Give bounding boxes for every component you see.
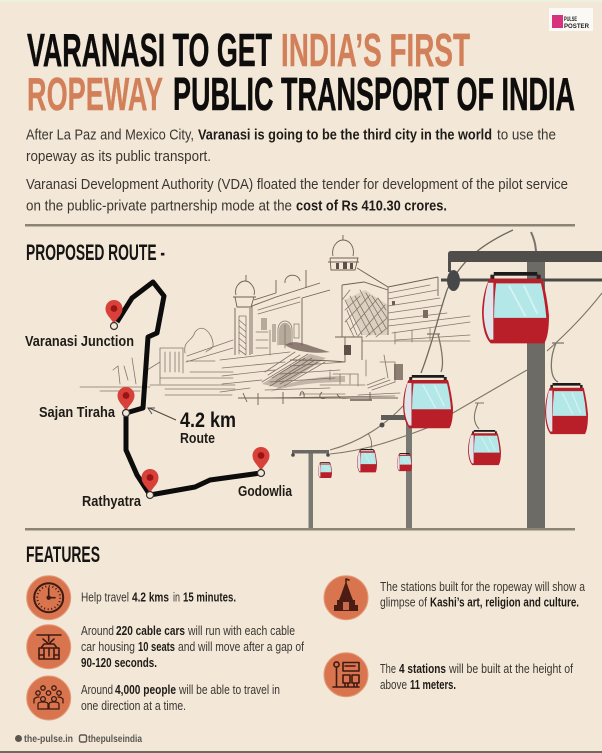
route line bbox=[117, 282, 261, 495]
gondola: near centre bbox=[403, 334, 453, 428]
main palace bbox=[252, 270, 330, 354]
label: Godowlia: Godowlia bbox=[238, 484, 293, 500]
intro paragraph 2: cost of Rs 410.30 crores. bbox=[296, 198, 447, 214]
label: Sajan Tiraha: Sajan Tiraha bbox=[39, 405, 116, 421]
feature text: cable cars: and will move after a gap of bbox=[178, 639, 304, 654]
icon: cable car bbox=[27, 625, 71, 669]
feature text: cable cars: Around bbox=[81, 623, 114, 638]
callout: 4.2 km route: 4.2 km bbox=[180, 409, 236, 432]
feature text: art and culture bbox=[380, 579, 586, 610]
feature text: cable cars: 90-120 seconds. bbox=[81, 655, 157, 670]
logo: Pulse Poster: POSTER bbox=[564, 24, 590, 30]
feature text: travel time: in bbox=[173, 590, 180, 605]
intro paragraph 1: After La Paz and Mexico City, bbox=[26, 126, 194, 144]
feature text: cable cars: car housing bbox=[81, 639, 135, 654]
heading: features: FEATURES bbox=[26, 542, 100, 567]
feature text: station height: will be built at the height of bbox=[448, 661, 573, 676]
gondola: distant bbox=[357, 433, 377, 472]
feature text: station height: The bbox=[380, 661, 396, 676]
label: Rathyatra: Rathyatra bbox=[82, 494, 142, 510]
left tower bbox=[233, 275, 256, 355]
footer: website and social handle: thepulseindia bbox=[88, 733, 142, 745]
feature text: cable cars: 220 cable cars bbox=[116, 623, 185, 638]
big tower with top beam bbox=[441, 251, 602, 529]
footer: website and social handle: the-pulse.in bbox=[24, 733, 73, 745]
feature text: people capacity bbox=[81, 682, 280, 713]
feature text: cable cars bbox=[81, 623, 304, 670]
cables bbox=[330, 230, 602, 454]
feature text: art and culture: glimpse of bbox=[380, 595, 427, 610]
callout: 4.2 km route bbox=[180, 409, 236, 447]
feature text: station height: 11 meters. bbox=[410, 677, 456, 692]
intro paragraph 1: Varanasi is going to be the third city in the world bbox=[198, 126, 492, 144]
feature text: travel time bbox=[81, 590, 236, 605]
feature text: people capacity: one direction at a time. bbox=[81, 698, 186, 713]
pin: Varanasi Junction bbox=[106, 300, 122, 330]
pin: Godowlia bbox=[252, 447, 270, 476]
intro paragraph 1 bbox=[26, 126, 556, 165]
gondola: right behind tower bbox=[545, 343, 588, 434]
pin: Sajan Tiraha bbox=[118, 387, 134, 416]
icon: station bbox=[324, 653, 368, 697]
gondola: farthest bbox=[318, 462, 332, 478]
intro paragraph 1: ropeway as its public transport. bbox=[26, 148, 211, 165]
feature text: people capacity: will be able to travel in bbox=[178, 682, 280, 697]
gondola: distant partly hidden bbox=[397, 453, 412, 471]
footer: website and social handle bbox=[15, 733, 142, 745]
base and stairs bbox=[290, 337, 362, 362]
right wing bbox=[388, 277, 438, 296]
intro paragraph 2 bbox=[26, 176, 568, 214]
mid pole bbox=[380, 415, 412, 529]
title bbox=[27, 24, 575, 120]
title: VARANASI TO GET bbox=[27, 24, 272, 76]
intro paragraph 1: to use the bbox=[497, 126, 556, 144]
pin: Rathyatra bbox=[142, 469, 158, 498]
label: Varanasi Junction: Varanasi Junction bbox=[25, 334, 134, 350]
feature text: cable cars: 10 seats bbox=[138, 639, 175, 654]
feature text: station height bbox=[380, 661, 573, 692]
feature text: station height: above bbox=[380, 677, 407, 692]
feature text: station height: 4 stations bbox=[399, 661, 446, 676]
intro paragraph 2: on the public-private partnership mode at the bbox=[26, 198, 292, 214]
title: INDIA’S FIRST bbox=[281, 24, 470, 76]
small pole bbox=[291, 450, 330, 529]
title: ROPEWAY bbox=[27, 68, 163, 120]
logo: Pulse Poster: PULSE bbox=[564, 17, 577, 23]
feature text: cable cars: will run with each cable bbox=[187, 623, 295, 638]
feature text: travel time: 15 minutes. bbox=[183, 590, 236, 605]
gondola: large bbox=[482, 272, 549, 343]
logo: Pulse Poster bbox=[549, 8, 593, 31]
sketch: Varanasi ghats and palace bbox=[80, 235, 470, 405]
feature text: travel time: 4.2 kms bbox=[132, 590, 169, 605]
feature text: people capacity: Around bbox=[81, 682, 113, 697]
icon: temple bbox=[324, 576, 368, 620]
icon: people bbox=[27, 676, 71, 720]
callout: 4.2 km route: Route bbox=[180, 431, 215, 447]
arrow to route bbox=[148, 408, 176, 420]
gondola: small middle bbox=[468, 403, 501, 465]
icon: clock bbox=[27, 576, 71, 620]
big dome bbox=[328, 235, 388, 337]
feature text: travel time: Help travel bbox=[81, 590, 129, 605]
heading: proposed route: PROPOSED ROUTE - bbox=[26, 240, 165, 265]
feature text: people capacity: 4,000 people bbox=[115, 682, 176, 697]
